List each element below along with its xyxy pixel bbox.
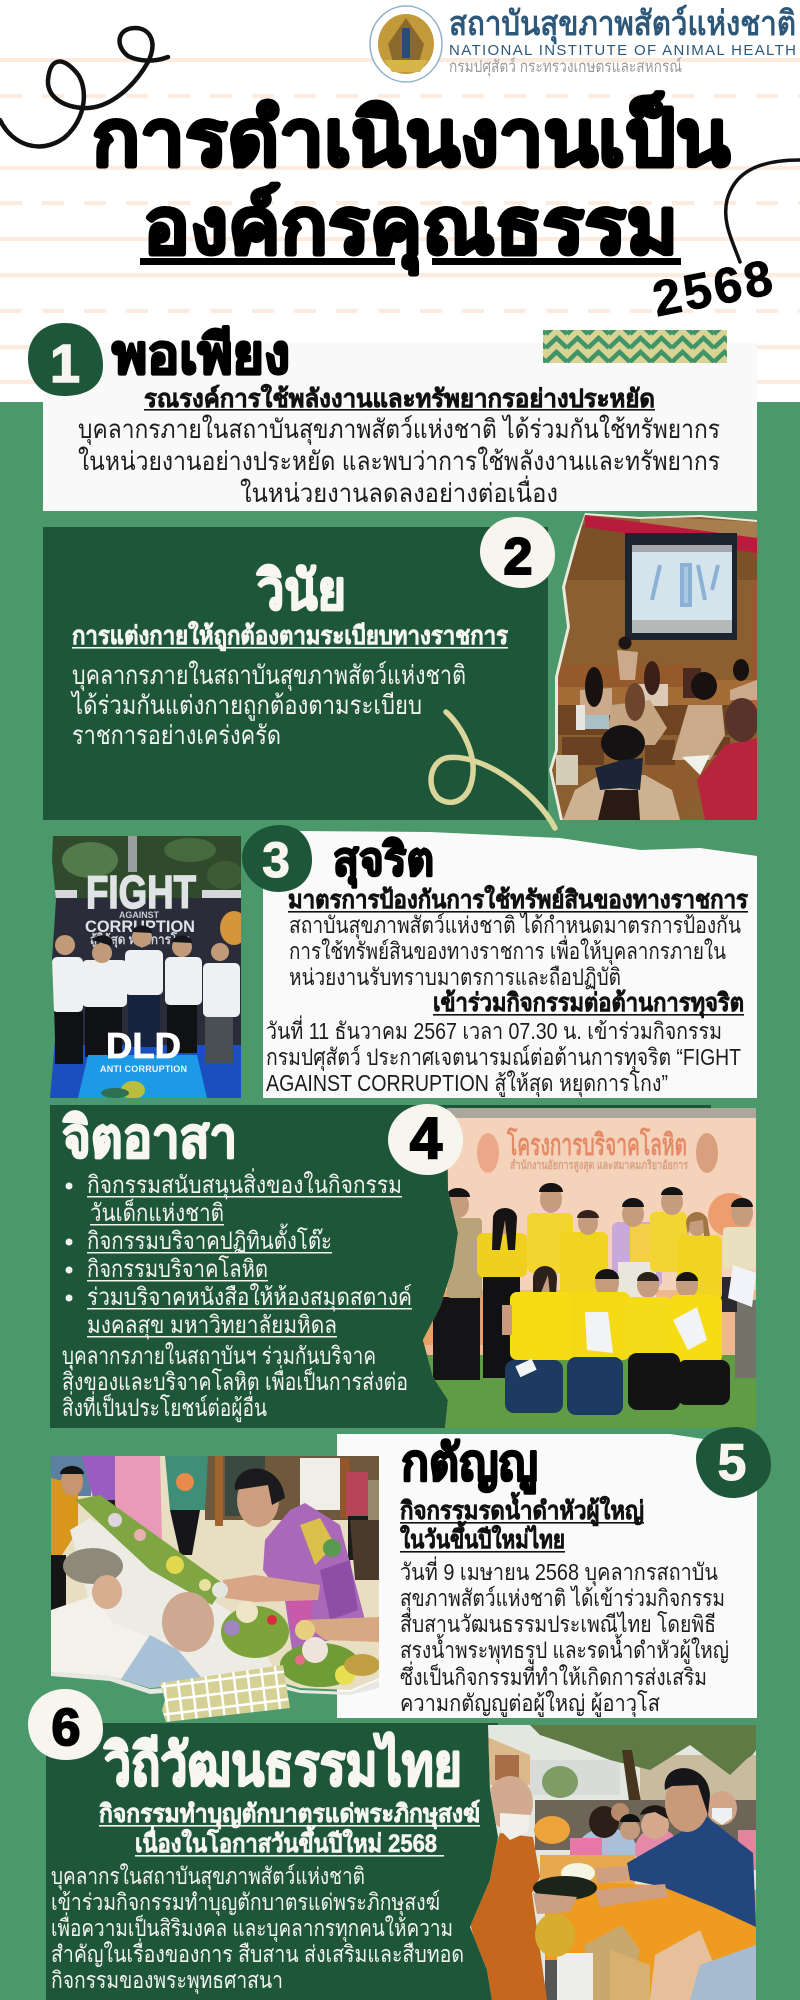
- subheading: กิจกรรมรดน้ำดำหัวผู้ใหญ่: [400, 1491, 644, 1527]
- badge 6: 6: [52, 1699, 80, 1757]
- photo: alms giving: [470, 1725, 757, 2000]
- body text: ได้ร่วมกันแต่งกายถูกต้องตามระเบียบ: [70, 690, 422, 721]
- icon: squiggle: [431, 712, 555, 828]
- body text: [78, 414, 720, 508]
- body text: [289, 912, 741, 990]
- badge 5: 5: [718, 1434, 746, 1492]
- body text: เข้าร่วมกิจกรรมทำบุญตักบาตรแด่พระภิกษุสงฆ์: [51, 1889, 440, 1916]
- heading: จิตอาสา: [62, 1106, 237, 1169]
- decorative grid tape: [160, 1665, 290, 1722]
- subheading: มาตรการป้องกันการใช้ทรัพย์สินของทางราชการ: [288, 884, 749, 914]
- subheading: เนื่องในโอกาสวันขึ้นปีใหม่ 2568: [135, 1824, 437, 1858]
- panel 5: gratitude: [51, 1427, 771, 1722]
- activity list: ร่วมบริจาคหนังสือให้ห้องสมุดสตางค์: [87, 1283, 412, 1312]
- department: กรมปศุสัตว์ กระทรวงเกษตรและสหกรณ์: [449, 57, 682, 77]
- subheading: รณรงค์การใช้พลังงานและทรัพยากรอย่างประหยัด: [144, 383, 655, 413]
- panel 3: honesty: [48, 825, 757, 1100]
- body text: สุขภาพสัตว์แห่งชาติ ได้เข้าร่วมกิจกรรม: [400, 1585, 725, 1612]
- badge 3: [242, 825, 312, 892]
- body text: [51, 1863, 464, 1994]
- body text 2: AGAINST CORRUPTION สู้ให้สุด หยุดการโกง”: [266, 1070, 668, 1097]
- body text: สิ่งของและบริจาคโลหิต เพื่อเป็นการส่งต่อ: [62, 1365, 408, 1396]
- activity list: มงคลสุข มหาวิทยาลัยมหิดล: [87, 1312, 337, 1340]
- body text: สรงน้ำพระพุทธรูป และรดน้ำดำหัวผู้ใหญ่: [400, 1634, 729, 1664]
- subheading: กิจกรรมทำบุญตักบาตรแด่พระภิกษุสงฆ์: [99, 1799, 480, 1830]
- panel 2: discipline: [43, 513, 759, 828]
- activity list: กิจกรรมบริจาคโลหิต: [87, 1255, 268, 1283]
- photo: anti corruption event: AGAINST: [119, 910, 159, 920]
- photo: anti corruption event: สู้ให้สุด หยุดการโกง: [90, 931, 190, 948]
- photo: anti corruption event: ANTI CORRUPTION: [100, 1064, 187, 1074]
- badge 5: [696, 1427, 771, 1498]
- badge 4: 4: [410, 1106, 442, 1171]
- body text 2: วันที่ 11 ธันวาคม 2567 เวลา 07.30 น. เข้าร่วมกิจกรรม: [266, 1015, 722, 1044]
- photo: blood donation group: [423, 1108, 756, 1428]
- heading: กตัญญู: [401, 1435, 538, 1494]
- subheading: [400, 1491, 644, 1554]
- body text: สำคัญในเรื่องของการ สืบสาน ส่งเสริมและสืบทอด: [51, 1938, 464, 1967]
- organisation name english: NATIONAL INSTITUTE OF ANIMAL HEALTH: [449, 42, 796, 59]
- body text: บุคลากรภายในสถาบันสุขภาพสัตว์แห่งชาติ ได้ร่วมกันใช้ทรัพยากร: [78, 414, 720, 445]
- badge 3: 3: [262, 832, 290, 888]
- panel 6: thai culture: [28, 1689, 757, 2000]
- photo: seminar room: [549, 513, 759, 820]
- scribble: right: [726, 160, 800, 262]
- title: การดำเนินงานเป็น: [92, 92, 730, 182]
- title: [92, 92, 730, 275]
- photo: anti corruption event: FIGHT: [86, 866, 196, 918]
- body text: ราชการอย่างเคร่งครัด: [72, 720, 281, 750]
- title: องค์กรคุณธรรม: [143, 182, 678, 275]
- body text: ซึ่งเป็นกิจกรรมที่ทำให้เกิดการส่งเสริม: [400, 1661, 707, 1690]
- photo: water pouring ceremony: [51, 1456, 380, 1695]
- body text 2: [266, 1015, 741, 1097]
- photo: blood donation group: สำนักงานอัยการสูงสุด และสมาคมภริยาอัยการ: [510, 1158, 688, 1173]
- subheading 2: เข้าร่วมกิจกรรมต่อต้านการทุจริต: [433, 989, 744, 1019]
- badge 4: [388, 1104, 463, 1175]
- activity list: กิจกรรมสนับสนุนสิ่งของในกิจกรรม: [87, 1168, 402, 1200]
- body text: ในหน่วยงานอย่างประหยัด และพบว่าการใช้พลังงานและทรัพยากร: [78, 446, 720, 476]
- body text: สืบสานวัฒนธรรมประเพณีไทย โดยพิธี: [400, 1611, 716, 1637]
- body text: ความกตัญญูต่อผู้ใหญ่ ผู้อาวุโส: [400, 1690, 660, 1717]
- body text: บุคลากรในสถาบันสุขภาพสัตว์แห่งชาติ: [51, 1863, 365, 1890]
- heading: สุจริต: [333, 833, 434, 888]
- year: 2568: [648, 249, 780, 327]
- badge 1: [28, 323, 103, 396]
- body text: บุคลากรภายในสถาบันสุขภาพสัตว์แห่งชาติ: [72, 660, 466, 691]
- body text: [70, 660, 466, 750]
- activity list: กิจกรรมบริจาคปฏิทินตั้งโต๊ะ: [87, 1223, 332, 1255]
- body text: วันที่ 9 เมษายน 2568 บุคลากรสถาบัน: [400, 1556, 718, 1586]
- subheading: การแต่งกายให้ถูกต้องตามระเบียบทางราชการ: [72, 620, 509, 652]
- panel 4: volunteering: [50, 1104, 756, 1428]
- logo: [370, 4, 796, 82]
- badge 2: 2: [504, 528, 532, 586]
- activity list: วันเด็กแห่งชาติ: [90, 1198, 224, 1227]
- body text: บุคลากรภายในสถาบันฯ ร่วมกันบริจาค: [62, 1342, 376, 1371]
- panel 1: sufficiency: [28, 323, 757, 511]
- photo: anti corruption event: CORRUPTION: [85, 917, 195, 936]
- photo: anti corruption event: DLD: [106, 1025, 181, 1066]
- body text: [400, 1556, 729, 1717]
- subheading: ในวันขึ้นปีใหม่ไทย: [400, 1520, 565, 1554]
- body text: เพื่อความเป็นสิริมงคล และบุคลากรทุกคนให้ความ: [51, 1912, 453, 1942]
- heading: วิถีวัฒนธรรมไทย: [103, 1732, 462, 1798]
- subheading: [99, 1799, 480, 1858]
- body text: หน่วยงานรับทราบมาตรการและถือปฏิบัติ: [289, 964, 621, 990]
- body text: ในหน่วยงานลดลงอย่างต่อเนื่อง: [240, 475, 558, 508]
- badge 6: [28, 1689, 103, 1760]
- body text: [62, 1342, 408, 1423]
- activity list: [66, 1168, 412, 1340]
- photo: anti corruption event: [48, 835, 248, 1100]
- body text: สิ่งที่เป็นประโยชน์ต่อผู้อื่น: [62, 1391, 267, 1423]
- heading: วินัย: [256, 561, 346, 621]
- body text: กิจกรรมของพระพุทธศาสนา: [51, 1967, 283, 1994]
- heading: พอเพียง: [112, 325, 290, 385]
- badge 1: 1: [50, 334, 80, 394]
- decorative tape: [543, 330, 727, 363]
- photo: blood donation group: โครงการบริจาคโลหิต: [506, 1126, 687, 1162]
- icon: institute seal: [370, 6, 442, 82]
- scribble: left: [0, 28, 168, 146]
- badge 2: [480, 517, 555, 588]
